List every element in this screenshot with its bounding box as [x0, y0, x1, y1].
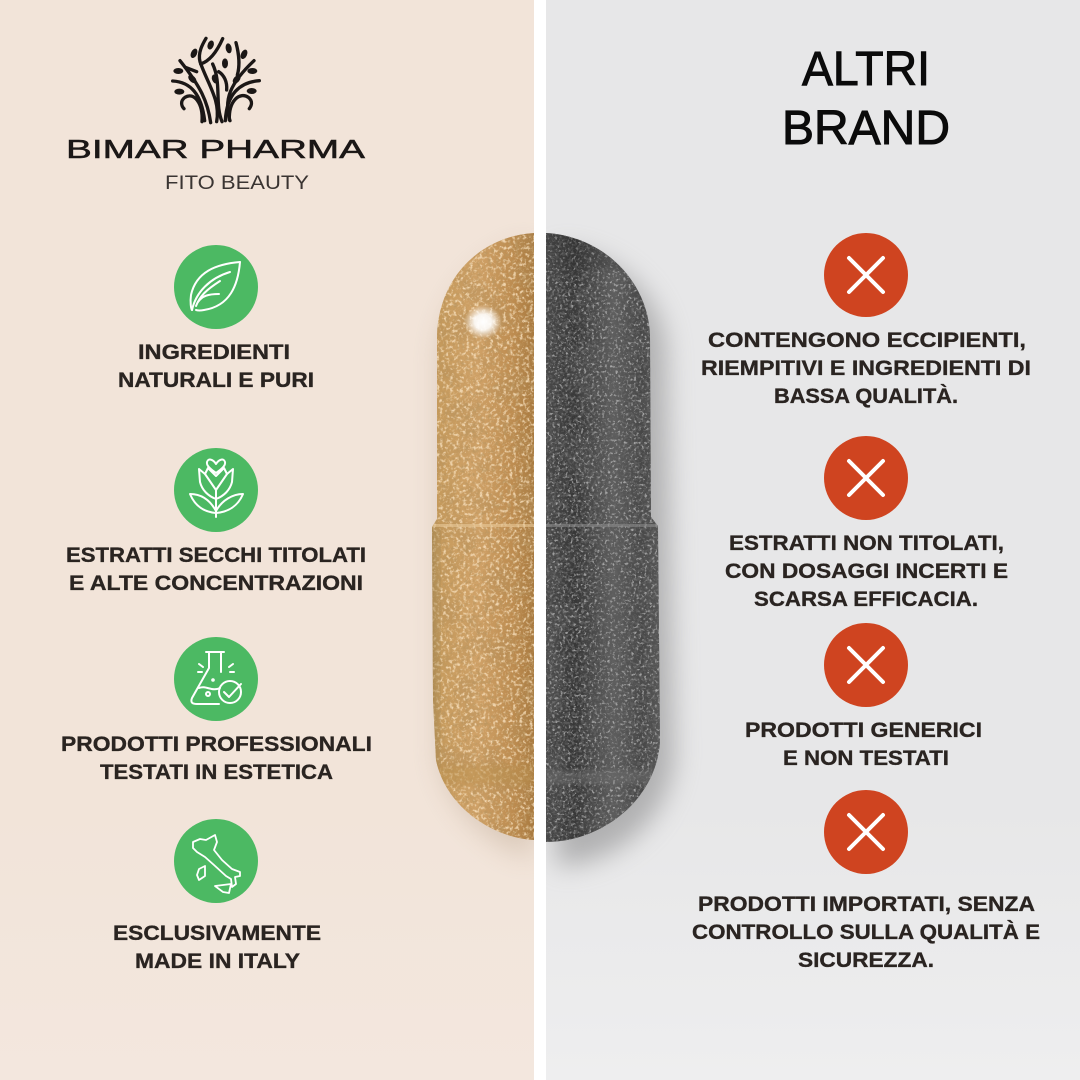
- label: ESCLUSIVAMENTE: [113, 922, 321, 945]
- icon: flask with check: [174, 637, 258, 721]
- icon: red cross: [824, 233, 908, 317]
- label: CON DOSAGGI INCERTI E: [725, 560, 1008, 583]
- label: ESTRATTI NON TITOLATI,: [729, 532, 1004, 555]
- label: TESTATI IN ESTETICA: [100, 761, 333, 784]
- label: CONTROLLO SULLA QUALITÀ E: [692, 921, 1040, 944]
- panel: right background: [546, 0, 1080, 1080]
- label: BASSA QUALITÀ.: [774, 385, 958, 408]
- item: prodotti generici: [745, 623, 982, 770]
- heading: altri brand: [782, 43, 950, 155]
- item: prodotti importati: [692, 790, 1040, 972]
- brand name: BIMAR PHARMA: [66, 134, 366, 164]
- item: contengono eccipienti: [701, 233, 1031, 408]
- item: estratti non titolati: [725, 436, 1008, 611]
- label: ESTRATTI SECCHI TITOLATI: [66, 544, 366, 567]
- label: MADE IN ITALY: [135, 950, 300, 973]
- logo: Bimar Pharma: [66, 38, 366, 194]
- heading: altri brand: ALTRI: [802, 43, 930, 96]
- highlight: [464, 305, 502, 339]
- label: SCARSA EFFICACIA.: [754, 588, 978, 611]
- capsule: dark right half: [546, 230, 674, 866]
- icon: tree: [173, 38, 259, 123]
- icon: red cross: [824, 790, 908, 874]
- label: E NON TESTATI: [783, 747, 949, 770]
- item: estratti secchi: [66, 448, 366, 595]
- label: SICUREZZA.: [798, 949, 934, 972]
- label: PRODOTTI IMPORTATI, SENZA: [698, 893, 1035, 916]
- label: PRODOTTI PROFESSIONALI: [61, 733, 372, 756]
- label: INGREDIENTI: [138, 341, 290, 364]
- item: prodotti professionali: [61, 637, 372, 784]
- icon: italy map: [174, 819, 258, 903]
- label: E ALTE CONCENTRAZIONI: [69, 572, 363, 595]
- icon: rose: [174, 448, 258, 532]
- label: RIEMPITIVI E INGREDIENTI DI: [701, 357, 1031, 380]
- icon: leaf: [174, 245, 258, 329]
- brand subtitle: FITO BEAUTY: [165, 173, 309, 194]
- label: CONTENGONO ECCIPIENTI,: [708, 329, 1026, 352]
- label: PRODOTTI GENERICI: [745, 719, 982, 742]
- icon: red cross: [824, 623, 908, 707]
- item: made in italy: [113, 819, 321, 973]
- panel: left background: [0, 0, 534, 1080]
- icon: red cross: [824, 436, 908, 520]
- label: NATURALI E PURI: [118, 369, 314, 392]
- item: ingredienti naturali: [118, 245, 314, 392]
- capsule: natural left half: [430, 230, 534, 858]
- heading: altri brand: BRAND: [782, 102, 950, 155]
